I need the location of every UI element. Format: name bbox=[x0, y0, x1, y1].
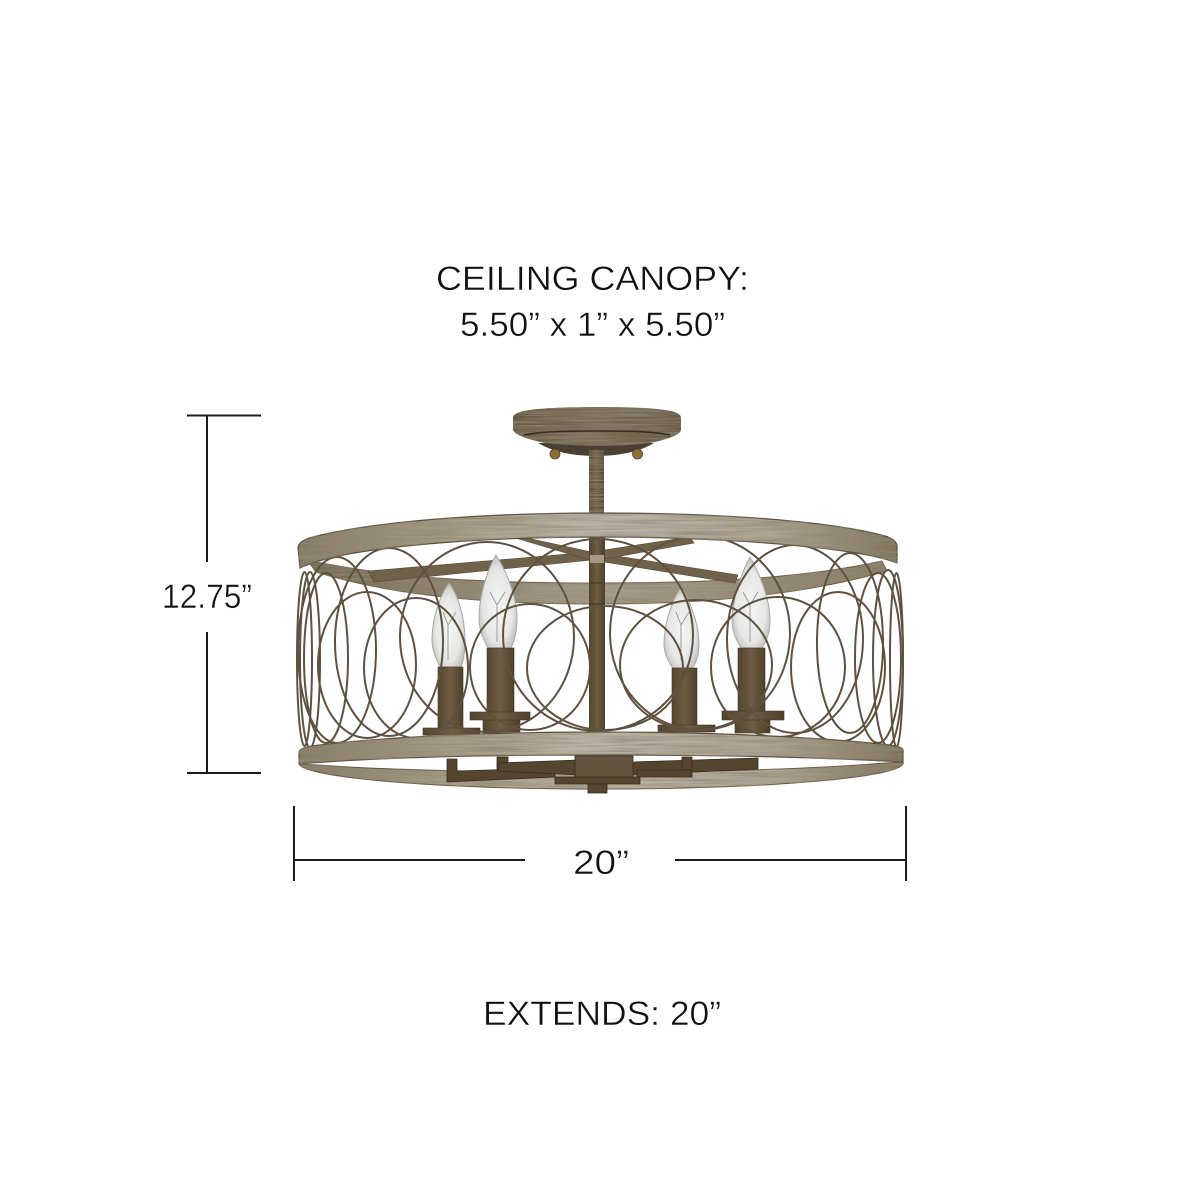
heading: ceiling canopy dimensions bbox=[436, 260, 749, 344]
hub and arms bbox=[447, 756, 758, 793]
cross bars bbox=[368, 536, 738, 583]
heading: ceiling canopy dimensions: 5.50” x 1” x 5.50” bbox=[460, 306, 725, 344]
center stem bbox=[589, 535, 605, 735]
height dimension: 12.75 inches bbox=[162, 415, 261, 773]
extends label: EXTENDS: 20” bbox=[483, 995, 721, 1033]
back of top ring bbox=[307, 560, 887, 604]
lower inner ring bbox=[299, 762, 903, 789]
height dimension: 12.75 inches: 12.75” bbox=[162, 578, 252, 616]
width dimension: 20 inches bbox=[294, 806, 906, 882]
upper support stem bbox=[589, 450, 604, 520]
filaments bbox=[443, 592, 758, 660]
width dimension: 20 inches: 20” bbox=[573, 844, 629, 882]
bulbs bbox=[432, 555, 770, 668]
bottom front ring bbox=[299, 732, 903, 764]
ceiling light fixture bbox=[297, 407, 903, 793]
looped wire cage bbox=[297, 536, 903, 748]
ceiling canopy plate bbox=[513, 407, 681, 456]
candle sleeves bbox=[423, 648, 784, 735]
heading: ceiling canopy dimensions: CEILING CANOPY: bbox=[436, 260, 749, 298]
canopy mounting screws bbox=[550, 449, 642, 459]
top front ring bbox=[298, 513, 897, 568]
